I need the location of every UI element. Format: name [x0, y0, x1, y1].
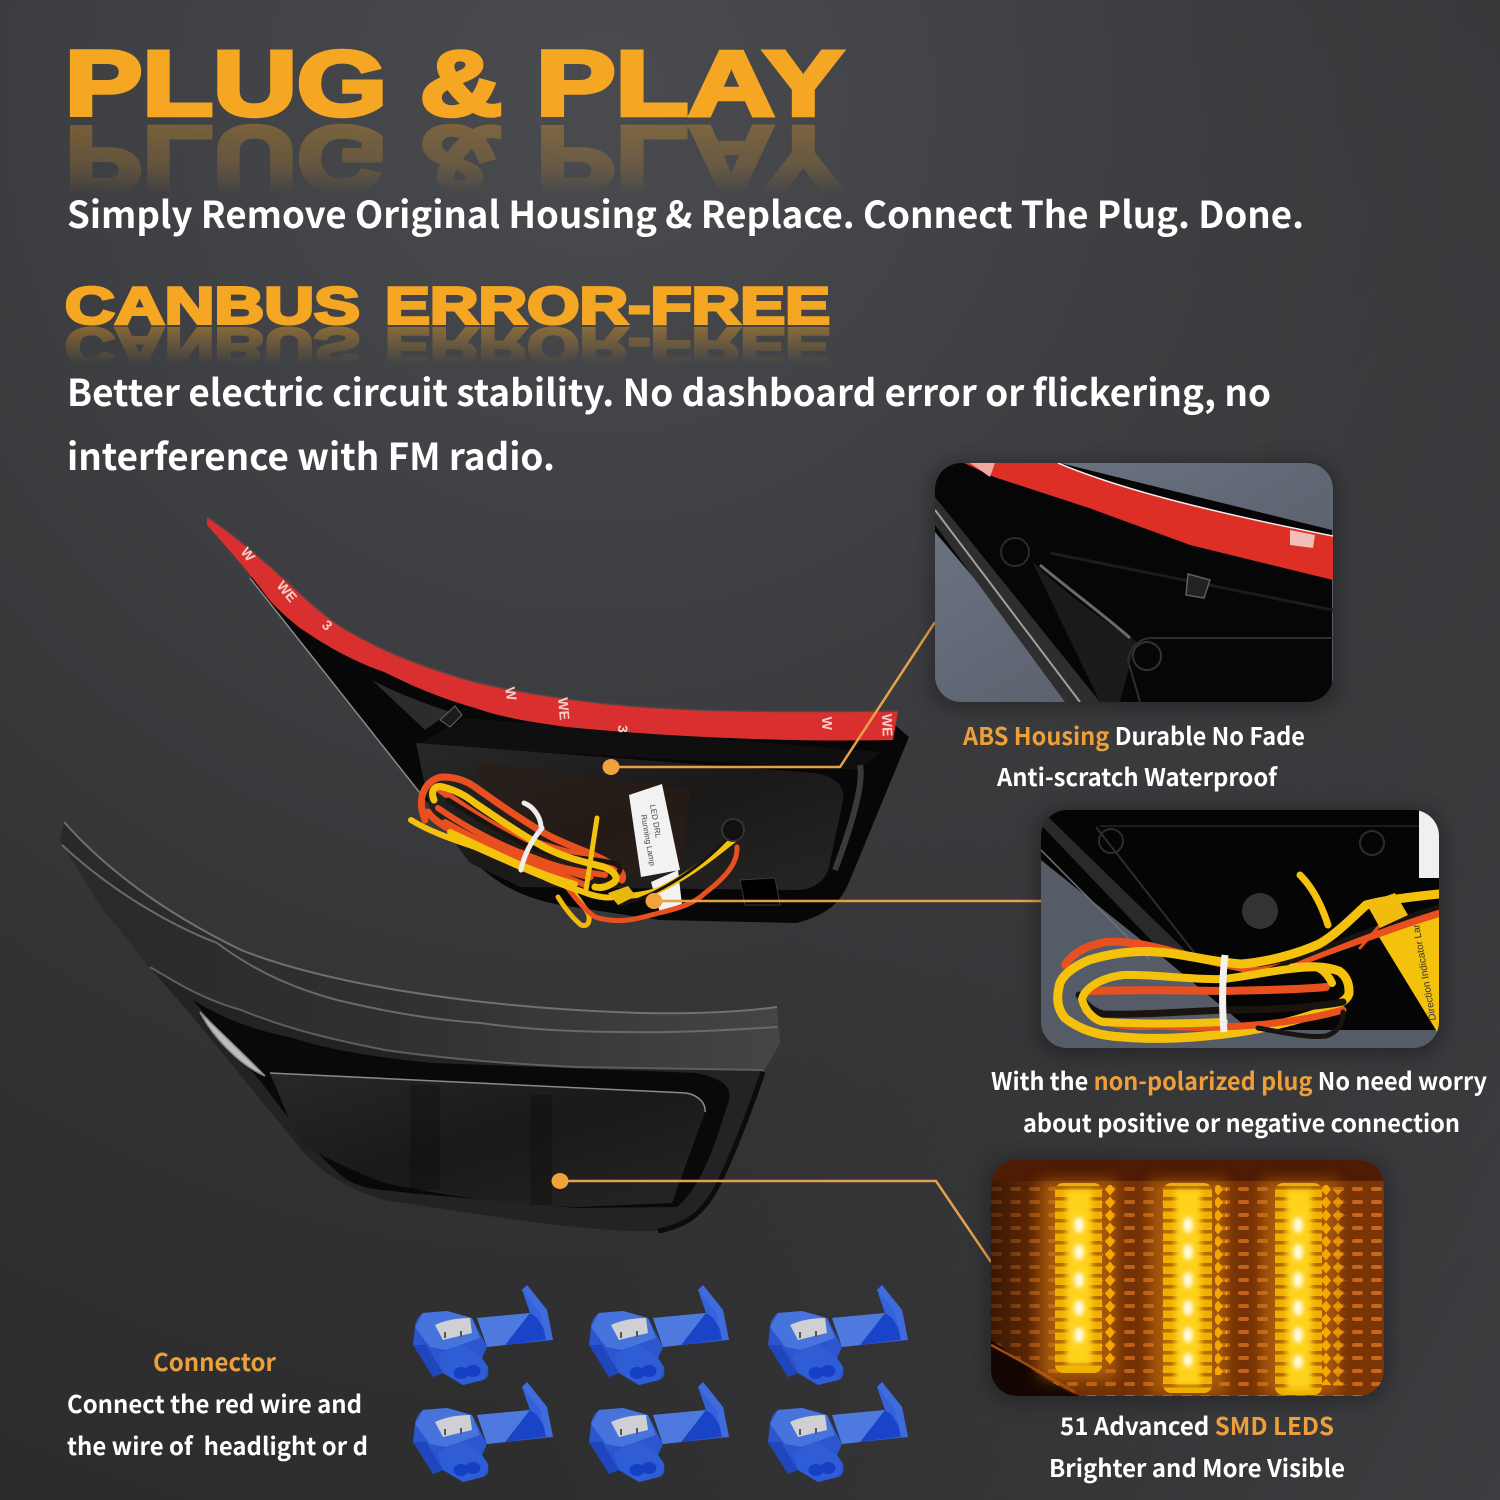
- wire bundle: [411, 777, 737, 926]
- text block: connector: Connector: [153, 1344, 276, 1379]
- 3M marks on strip: W: [238, 544, 259, 565]
- text block: connector: [67, 1344, 368, 1463]
- white cable tie: [521, 803, 542, 870]
- product: upper lamp back with wires: LED DRL: [648, 804, 663, 839]
- title reflection: PLAY: [536, 107, 843, 209]
- white label: [629, 784, 680, 877]
- white tie: [1223, 955, 1225, 1032]
- white label corner: [1419, 810, 1439, 878]
- panel: abs housing closeup: [930, 462, 1338, 710]
- yellow tag: [1376, 917, 1439, 1035]
- caption: non-polarized plug: With the non-polarized plug No need worry: [991, 1063, 1487, 1098]
- title: plug and play: &: [420, 33, 502, 135]
- text block: canbus description: Better electric circuit stability. No dashboard error or flickering, no: [67, 363, 1271, 417]
- callout: leds: [552, 1173, 991, 1262]
- canbus reflection: CANBUS: [65, 316, 360, 374]
- sensor mesh: [1242, 893, 1278, 929]
- 3M marks on strip: WE: [879, 714, 896, 737]
- 3M marks on strip: 3: [615, 725, 631, 733]
- red adhesive strip closeup: [964, 463, 1333, 580]
- canbus reflection: ERROR-FREE: [385, 316, 830, 374]
- 3M marks on strip: W: [819, 717, 835, 731]
- panel: wiring closeup: [1036, 809, 1444, 1056]
- smoked lens: [416, 743, 843, 890]
- product: upper lamp back with wires: [207, 517, 909, 926]
- title: plug and play: PLUG: [65, 33, 387, 135]
- wire grommet: [722, 819, 744, 841]
- led column 1: [1055, 1183, 1114, 1373]
- smoked lens: [270, 1073, 705, 1207]
- caption: abs housing: ABS Housing Durable No Fade: [962, 718, 1305, 753]
- caption: non-polarized plug: [991, 1063, 1487, 1140]
- heading: canbus error-free: ERROR-FREE: [385, 278, 830, 336]
- 3M marks on strip: W: [502, 686, 520, 702]
- led column 3: [1275, 1183, 1346, 1395]
- glossy edge: [200, 1012, 265, 1076]
- subtitle: plug and play description: Simply Remove Original Housing & Replace. Connect The Plug. Done.: [67, 185, 1304, 239]
- black housing: [250, 570, 909, 923]
- title: plug and play: [70, 48, 846, 188]
- product: lower lamp front: [60, 822, 780, 1231]
- text block: canbus description: [67, 363, 1271, 481]
- product: upper lamp back with wires: Running Lamp: [639, 814, 657, 867]
- black housing closeup: [1041, 810, 1439, 1030]
- heading: canbus error-free: [66, 286, 830, 360]
- canbus reflection: [66, 326, 830, 360]
- callout: plug: [646, 893, 1041, 909]
- title: plug and play: PLAY: [536, 33, 843, 135]
- wire loops: [1058, 875, 1439, 1038]
- wire connector bead: [608, 886, 636, 905]
- text block: canbus description: interference with FM radio.: [67, 427, 555, 481]
- connector clip: [740, 878, 780, 905]
- peg detail: [1186, 574, 1210, 598]
- text block: connector: Connect the red wire and: [67, 1386, 362, 1421]
- 3M marks on strip: 3: [319, 617, 336, 634]
- caption: abs housing: Anti-scratch Waterproof: [996, 759, 1278, 794]
- 3M marks on strip: [238, 544, 896, 737]
- icons: six blue wire connectors: [413, 1285, 908, 1482]
- lower rim: [146, 963, 763, 1231]
- 3M marks on strip: WE: [555, 697, 573, 721]
- callout lines and dots: [552, 622, 1041, 1262]
- outer body: [60, 822, 780, 1231]
- caption: smd leds: [1049, 1408, 1345, 1485]
- title reflection: &: [420, 107, 502, 209]
- caption: smd leds: Brighter and More Visible: [1049, 1450, 1345, 1485]
- panel: wiring closeup: Direction Indicator Lamp: [1409, 912, 1439, 1021]
- 3M marks on strip: WE: [274, 578, 300, 605]
- black housing closeup: [935, 463, 1332, 702]
- text block: connector: the wire of headlight or d: [67, 1428, 368, 1463]
- yellow cable tie: [1366, 893, 1408, 928]
- panel: led closeup: [986, 1158, 1389, 1403]
- caption: non-polarized plug: about positive or negative connection: [1023, 1105, 1460, 1140]
- heading: canbus error-free: CANBUS: [65, 278, 360, 336]
- led column 2: [1163, 1183, 1227, 1393]
- black recess: [193, 1000, 729, 1208]
- title reflection: PLUG: [65, 107, 387, 209]
- callout: abs housing: [602, 622, 935, 775]
- caption: smd leds: 51 Advanced SMD LEDS: [1060, 1408, 1334, 1443]
- title reflection: [70, 124, 841, 188]
- caption: abs housing: [962, 718, 1305, 794]
- adhesive strip: [207, 517, 898, 740]
- body contour lines: [62, 822, 777, 1070]
- mounting peg: [440, 706, 462, 727]
